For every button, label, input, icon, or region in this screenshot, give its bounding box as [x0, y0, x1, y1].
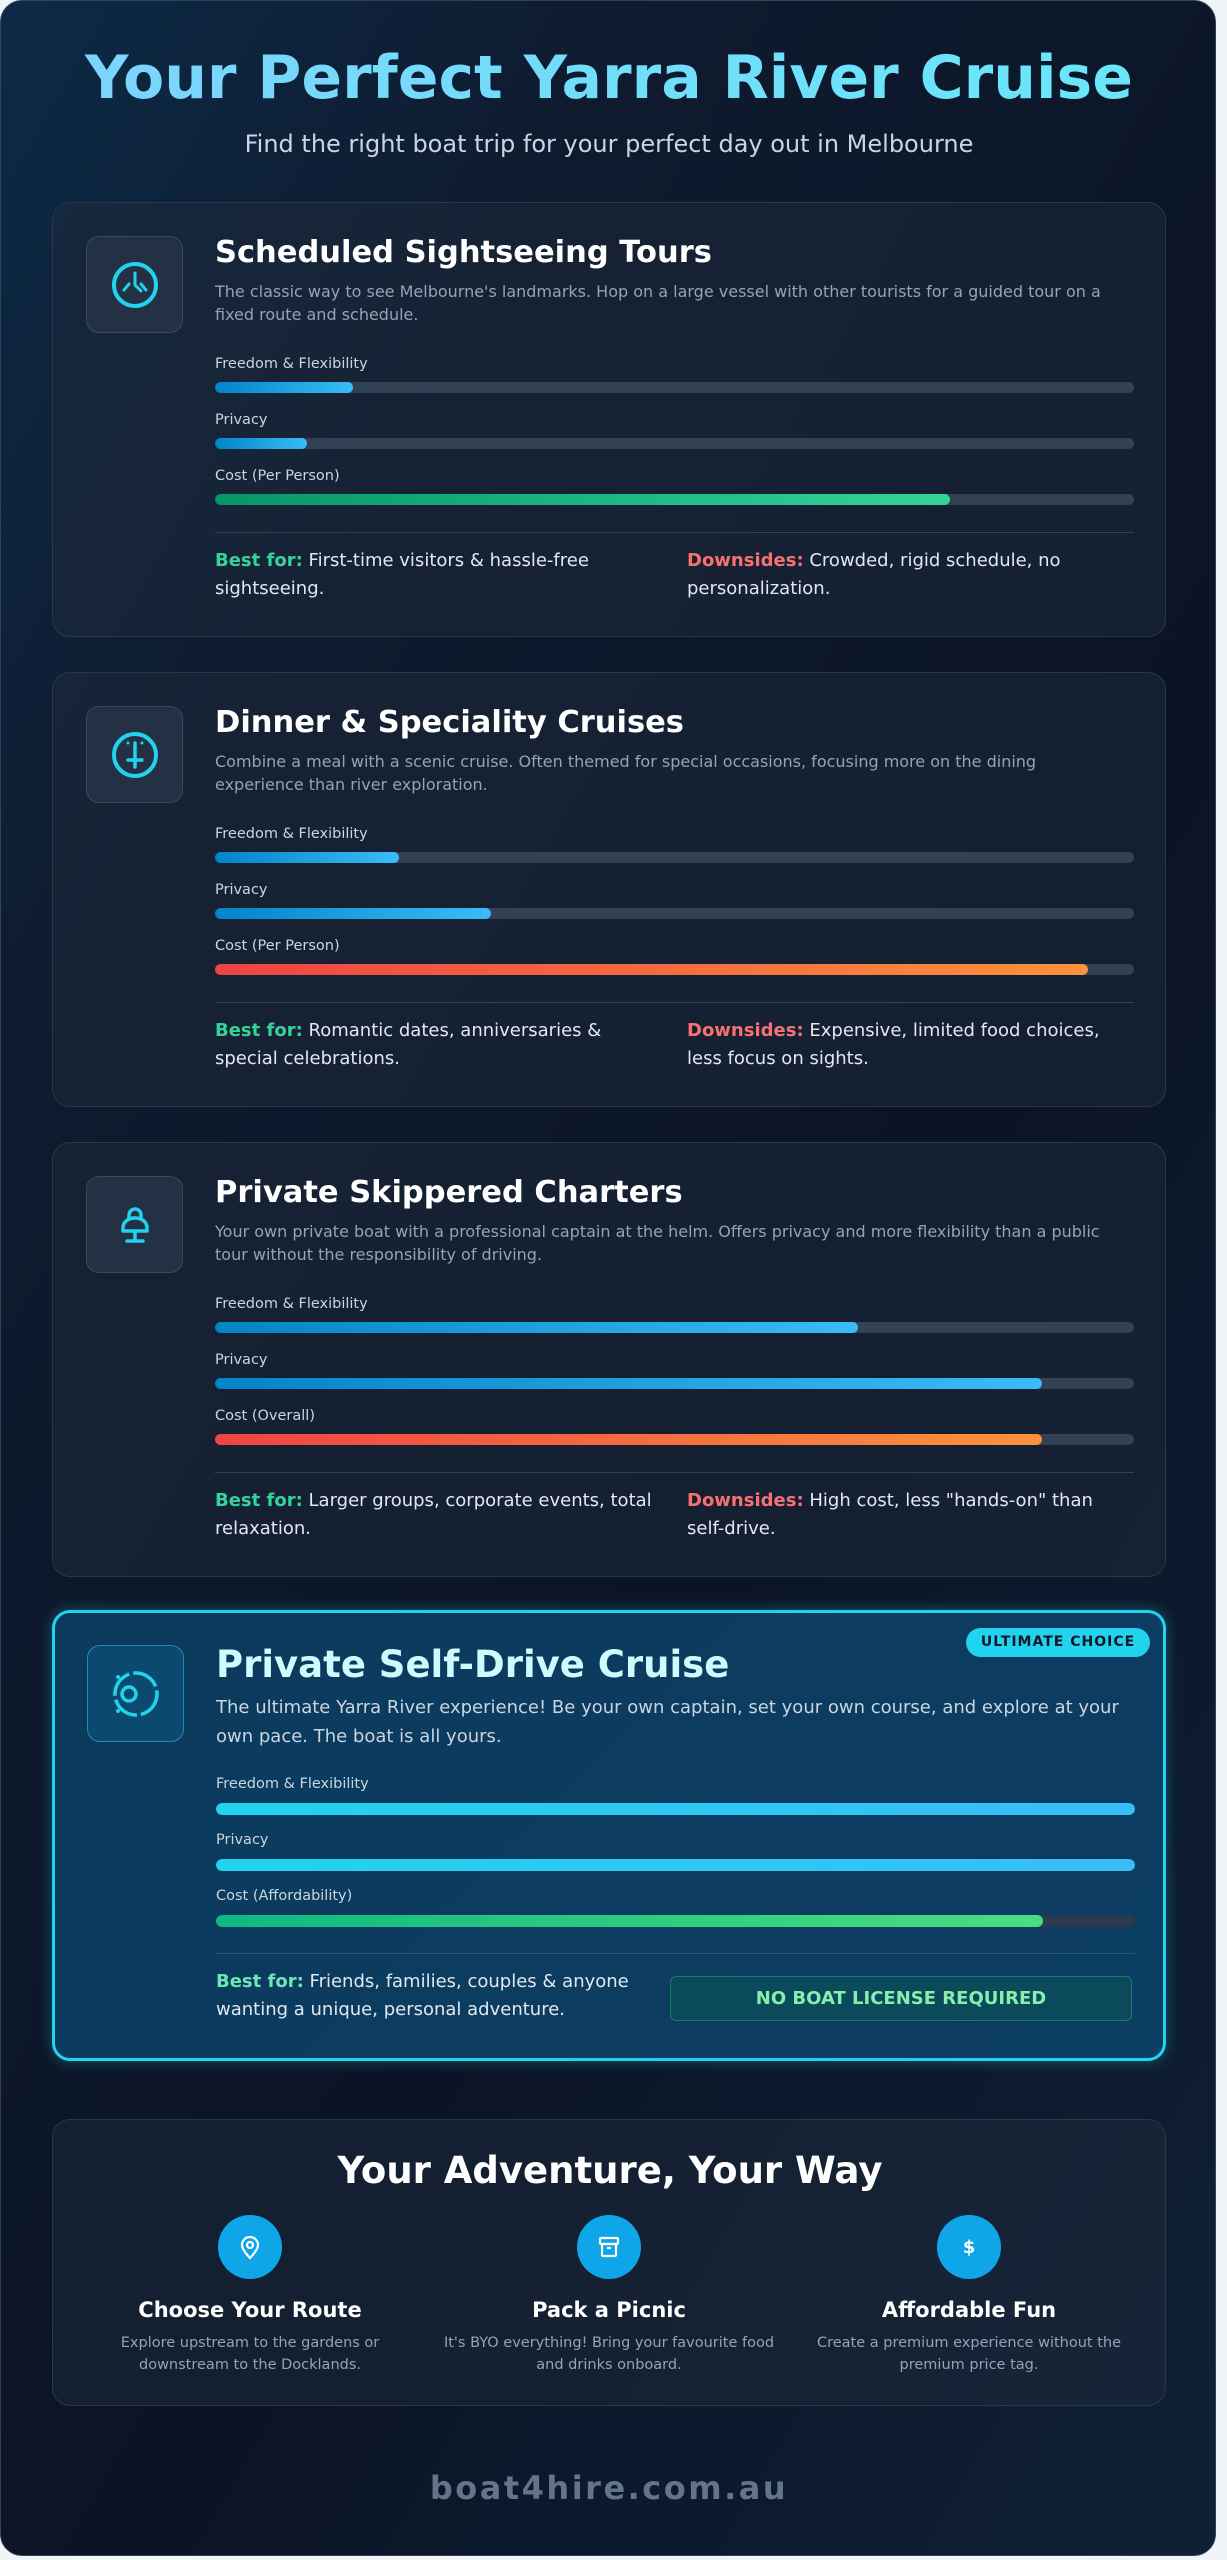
heading: Your Adventure, Your Way — [338, 2149, 882, 2192]
subtitle: Find the right boat trip for your perfect day out in Melbourne — [245, 130, 973, 158]
panel: private skippered charters — [52, 1142, 1166, 1577]
bar: cost — [215, 964, 1134, 975]
label: freedom: Freedom & Flexibility — [216, 1776, 369, 1792]
feature: pack a picnic: and drinks onboard. — [536, 2357, 682, 2373]
bar: cost — [215, 1434, 1134, 1445]
downsides: Downsides: High cost, less "hands-on" than self-drive. — [687, 1490, 1093, 1539]
bar: freedom — [215, 382, 1134, 393]
feature: choose your route — [121, 2215, 380, 2373]
best for: Best for: First-time visitors & hassle-free sightseeing. — [215, 550, 589, 599]
panel: dinner & speciality cruises — [52, 672, 1166, 1107]
label: cost: Cost (Overall) — [215, 1408, 315, 1424]
label: freedom: Freedom & Flexibility — [215, 1296, 368, 1312]
feature: pack a picnic: It's BYO everything! Bring your favourite food — [444, 2335, 774, 2351]
label: freedom: Freedom & Flexibility — [215, 356, 368, 372]
badge: ultimate choice — [966, 1628, 1150, 1657]
downsides: Downsides: Expensive, limited food choices, less focus on sights. — [687, 1020, 1100, 1069]
icon: dollar — [937, 2215, 1001, 2279]
best for: Best for: Romantic dates, anniversaries & special celebrations. — [215, 1020, 601, 1069]
icon: compass clock — [86, 236, 183, 333]
panel: private self-drive cruise — [52, 1610, 1166, 2061]
label: privacy: Privacy — [215, 882, 268, 898]
description: The classic way to see Melbourne's landmarks. Hop on a large vessel with other tourists for a guided tour on a fixed route and schedule. — [215, 282, 1101, 324]
icon: box — [577, 2215, 641, 2279]
panel: scheduled sightseeing tours — [52, 202, 1166, 637]
bar: cost — [216, 1915, 1135, 1927]
feature: affordable fun: Create a premium experience without the — [817, 2335, 1121, 2351]
description: Your own private boat with a professional captain at the helm. Offers privacy and more flexibility than a public tour without the responsibility of driving. — [215, 1222, 1100, 1264]
bar: privacy — [216, 1859, 1135, 1871]
description: The ultimate Yarra River experience! Be your own captain, set your own course, and explore at your own pace. The boat is all yours. — [216, 1697, 1119, 1747]
icon: map pin — [218, 2215, 282, 2279]
feature: affordable fun: Affordable Fun — [882, 2298, 1056, 2322]
label: freedom: Freedom & Flexibility — [215, 826, 368, 842]
bar: privacy — [215, 908, 1134, 919]
best for: Best for: Friends, families, couples & anyone wanting a unique, personal adventure. — [216, 1971, 629, 2020]
downsides: Downsides: Crowded, rigid schedule, no personalization. — [687, 550, 1061, 599]
label: cost: Cost (Affordability) — [216, 1888, 352, 1904]
label: privacy: Privacy — [216, 1832, 268, 1848]
feature: affordable fun — [817, 2215, 1121, 2373]
bar: privacy — [215, 1378, 1134, 1389]
badge: ultimate choice: ULTIMATE CHOICE — [981, 1634, 1135, 1650]
heading: Dinner & Speciality Cruises — [215, 705, 684, 740]
bar: freedom — [216, 1803, 1135, 1815]
feature: choose your route: Explore upstream to the gardens or — [121, 2335, 379, 2351]
label: privacy: Privacy — [215, 1352, 268, 1368]
icon: captain bell — [86, 1176, 183, 1273]
label: cost: Cost (Per Person) — [215, 938, 340, 954]
best for: Best for: Larger groups, corporate events, total relaxation. — [215, 1490, 652, 1539]
bar: cost — [215, 494, 1134, 505]
panel: your adventure, your way — [52, 2119, 1166, 2406]
bar: freedom — [215, 852, 1134, 863]
heading: Private Skippered Charters — [215, 1175, 683, 1210]
feature: choose your route: Choose Your Route — [138, 2298, 362, 2322]
icon: dollar: $ — [963, 2236, 975, 2258]
feature: choose your route: downstream to the Docklands. — [139, 2357, 361, 2373]
icon: steering wheel — [87, 1645, 184, 1742]
bar: privacy — [215, 438, 1134, 449]
callout: no boat license: NO BOAT LICENSE REQUIRED — [756, 1988, 1046, 2009]
heading: Private Self-Drive Cruise — [216, 1643, 729, 1686]
feature: affordable fun: premium price tag. — [900, 2357, 1038, 2373]
callout: no boat license — [670, 1976, 1132, 2021]
description: Combine a meal with a scenic cruise. Often themed for special occasions, focusing more on the dining experience than river exploration. — [215, 752, 1036, 794]
title: Your Perfect Yarra River Cruise — [85, 43, 1133, 113]
icon: dinner — [86, 706, 183, 803]
footer: website: boat4hire.com.au — [430, 2469, 788, 2507]
feature: pack a picnic: Pack a Picnic — [532, 2298, 686, 2322]
feature: pack a picnic — [444, 2215, 774, 2373]
label: cost: Cost (Per Person) — [215, 468, 340, 484]
heading: Scheduled Sightseeing Tours — [215, 235, 712, 270]
label: privacy: Privacy — [215, 412, 268, 428]
bar: freedom — [215, 1322, 1134, 1333]
